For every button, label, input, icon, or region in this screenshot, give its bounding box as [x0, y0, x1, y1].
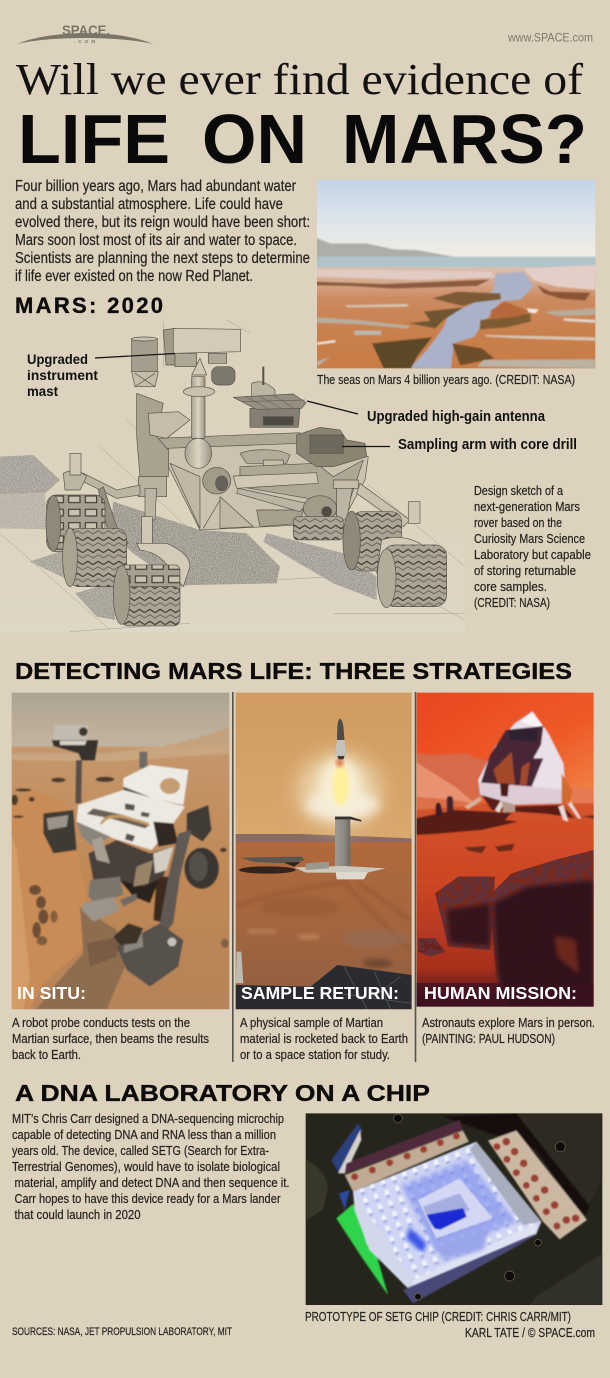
logo: SPACE.com: [17, 23, 153, 44]
callout: high-gain antenna: [307, 401, 546, 425]
caption: design sketch: next-generation Mars: [474, 500, 580, 514]
chip block: [353, 1142, 541, 1293]
callout: upgraded instrument mast: mast: [27, 383, 58, 399]
heading: three strategies: DETECTING MARS LIFE: THREE STRATEGIES: [15, 658, 572, 684]
connector strips: [345, 1120, 463, 1173]
caption: design sketch: rover based on the: [474, 516, 562, 530]
astronauts: [436, 802, 443, 816]
column and truss: [137, 393, 168, 477]
website url: www.SPACE.com: [507, 30, 593, 44]
rocks: [418, 850, 594, 1007]
paragraph: DNA chip: material, amplify and detect DNA and then sequence it.: [14, 1176, 290, 1190]
wheels: [184, 848, 219, 889]
caption: design sketch: core samples.: [474, 580, 547, 594]
paragraph: DNA chip: capable of detecting DNA and RNA less than a million: [12, 1128, 276, 1142]
label: human mission: HUMAN MISSION:: [424, 983, 577, 1003]
title line 2: ON: [202, 100, 307, 178]
paragraph: DNA chip: that could launch in 2020: [14, 1208, 141, 1222]
photo: Curiosity rover selfie: [10, 690, 233, 1013]
callout: sampling arm: Sampling arm with core drill: [398, 437, 577, 453]
label: in situ: IN SITU:: [17, 983, 86, 1003]
title line 2: [18, 100, 587, 178]
panel: in situ: [10, 690, 233, 1062]
panel: human mission: [415, 690, 597, 1046]
intro paragraph: Four billion years ago, Mars had abundant water: [15, 178, 296, 195]
description: in situ: [12, 1016, 209, 1062]
intro paragraph: and a substantial atmosphere. Life could have: [15, 196, 283, 213]
main body: [168, 433, 368, 530]
rover shadows: [0, 455, 377, 620]
divider lines: [233, 692, 416, 1062]
arm cluster: [297, 427, 367, 467]
description: in situ: back to Earth.: [12, 1048, 81, 1062]
caption: design sketch: [474, 484, 591, 610]
deck: [123, 765, 188, 805]
mast: [75, 760, 82, 803]
intro paragraph: evolved there, but its reign would have been short:: [15, 214, 310, 231]
axles: [233, 473, 318, 488]
callout: upgraded instrument mast: [27, 351, 175, 399]
title line 2: LIFE: [18, 100, 170, 178]
paragraph: DNA chip: [12, 1112, 290, 1222]
heading: Mars 2020: MARS: 2020: [15, 293, 163, 318]
description: in situ: A robot probe conducts tests on the: [12, 1016, 190, 1030]
intro paragraph: Scientists are planning the next steps to determine: [15, 250, 310, 267]
caption: design sketch: Design sketch of a: [474, 484, 563, 498]
image: seas on ancient Mars: [315, 178, 597, 371]
left suspension: [138, 477, 167, 497]
illustration: rocket launch: [234, 690, 414, 1012]
paragraph: DNA chip: years old. The device, called SETG (Search for Extra-: [12, 1144, 269, 1158]
label: sample return: SAMPLE RETURN:: [241, 983, 399, 1003]
intro paragraph: Mars soon lost most of its air and water to space.: [15, 232, 297, 249]
title line 2: MARS?: [342, 100, 587, 178]
caption: design sketch: (CREDIT: NASA): [474, 596, 550, 610]
caption: design sketch: Curiosity Mars Science: [474, 532, 585, 546]
description: sample return: A physical sample of Martian: [240, 1016, 383, 1030]
intro paragraph: [15, 178, 310, 285]
mast: [163, 328, 175, 365]
caption: design sketch: Laboratory but capable: [474, 548, 591, 562]
intro paragraph: if life ever existed on the now Red Planet.: [15, 268, 253, 285]
paragraph: DNA chip: Terrestrial Genomes), would have to isolate biological: [12, 1160, 280, 1174]
callout: upgraded instrument mast: Upgraded: [27, 351, 88, 367]
rover design sketch: [0, 320, 465, 633]
paragraph: DNA chip: MIT’s Chris Carr designed a DNA-sequencing microchip: [12, 1112, 284, 1126]
heading: DNA laboratory: A DNA LABORATORY ON A CHIP: [15, 1080, 430, 1106]
callout: upgraded instrument mast: instrument: [27, 367, 98, 383]
description: human mission: (PAINTING: PAUL HUDSON): [422, 1032, 555, 1046]
arm: [160, 830, 192, 933]
lander: [478, 712, 566, 804]
pad dots: [351, 1133, 579, 1229]
painting: lander and astronauts: [415, 690, 597, 1010]
caption: design sketch: of storing returnable: [474, 564, 576, 578]
callout: high-gain antenna: Upgraded high-gain antenna: [367, 409, 546, 425]
description: sample return: or to a space station for study.: [240, 1048, 390, 1062]
description: human mission: [422, 1016, 595, 1046]
logo: SPACE.com: .COM: [74, 39, 95, 44]
paragraph: DNA chip: Carr hopes to have this device ready for a Mars lander: [14, 1192, 280, 1206]
panel: sample return: [234, 690, 414, 1062]
description: sample return: material is rocketed back to Earth: [240, 1032, 408, 1046]
antenna: [252, 382, 275, 397]
description: in situ: Martian surface, then beams the results: [12, 1032, 209, 1046]
logo: SPACE.com: SPACE.: [62, 23, 110, 38]
photo: SETG chip prototype: [303, 1110, 606, 1310]
green tube: [336, 1204, 388, 1295]
wheels: [47, 495, 105, 552]
description: sample return: [240, 1016, 408, 1062]
title line 1: Will we ever find evidence of: [16, 55, 583, 104]
sources: SOURCES: NASA, JET PROPULSION LABORATORY, MIT: [12, 1326, 232, 1338]
